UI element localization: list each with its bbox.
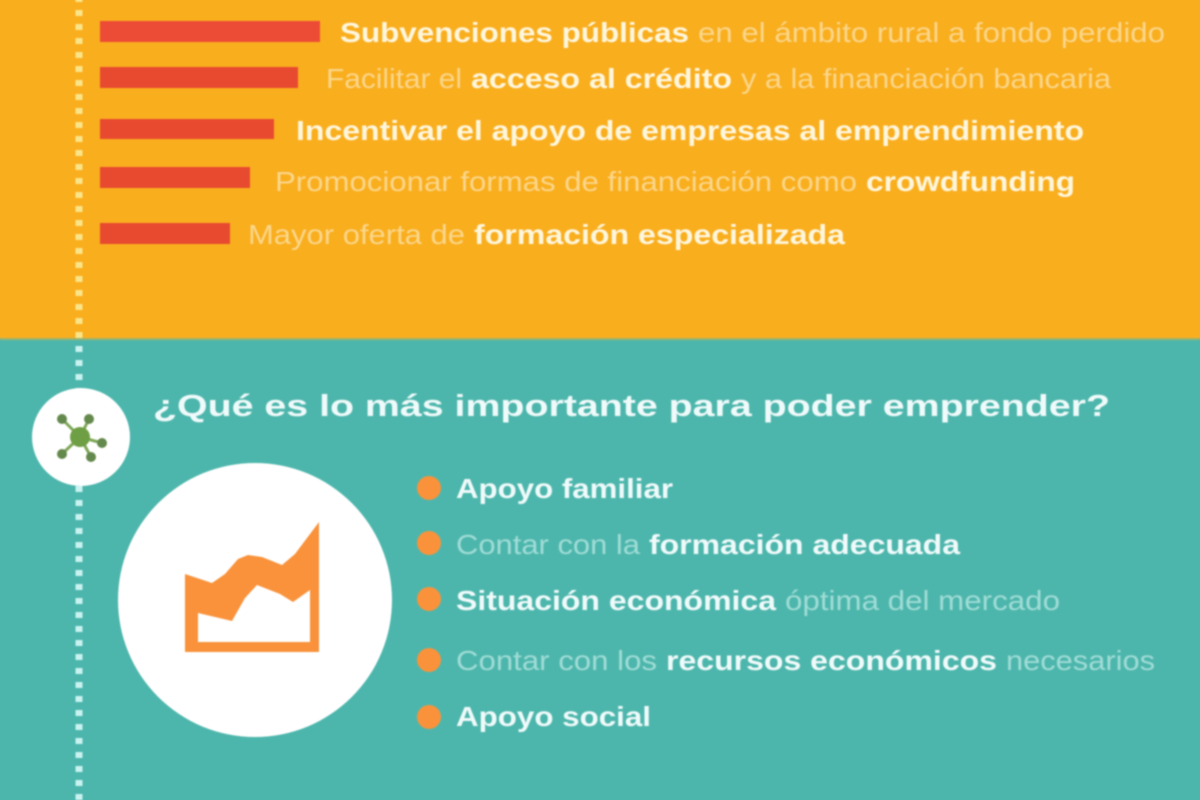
list: bullet 2: Contar con la bbox=[456, 529, 640, 560]
small circle with network icon bbox=[32, 388, 130, 486]
panel: most important to start a business bbox=[0, 338, 1200, 800]
text: formación especializada: Mayor oferta de bbox=[248, 219, 465, 250]
text: acceso al crédito: acceso al crédito bbox=[471, 63, 732, 94]
bar 5 bbox=[100, 223, 230, 244]
heading: ¿Qué es lo más importante para poder emprender? bbox=[153, 388, 1110, 423]
icon: network bbox=[57, 414, 107, 462]
panel: financing measures bbox=[0, 0, 1200, 338]
text: acceso al crédito bbox=[326, 63, 1111, 94]
list: bullet 4: recursos económicos bbox=[666, 645, 997, 676]
list: bullet 1: Apoyo familiar bbox=[456, 473, 673, 504]
list: bullet 3 bbox=[417, 585, 1060, 616]
large circle with area chart icon bbox=[118, 463, 392, 737]
bar 1 bbox=[100, 21, 320, 42]
text: formación especializada bbox=[248, 219, 845, 250]
icon: area chart bbox=[185, 522, 319, 652]
list: bullet 2: formación adecuada bbox=[649, 529, 960, 560]
text: crowdfunding bbox=[275, 166, 1075, 197]
bar 4 bbox=[100, 167, 250, 188]
bar 2 bbox=[100, 67, 298, 88]
text: subvenciones bbox=[340, 17, 1165, 48]
list: bullet 4 bbox=[417, 645, 1155, 676]
list: bullet 2 bbox=[417, 529, 960, 560]
text: acceso al crédito: Facilitar el bbox=[326, 63, 462, 94]
list: bullet 5: Apoyo social bbox=[456, 701, 651, 732]
bar 3 bbox=[100, 119, 274, 139]
list: bullet 3: Situación económica bbox=[456, 585, 776, 616]
text: subvenciones: en el ámbito rural a fondo perdido bbox=[698, 17, 1165, 48]
text: subvenciones: Subvenciones públicas bbox=[340, 17, 689, 48]
text: acceso al crédito: y a la financiación bancaria bbox=[741, 63, 1111, 94]
list: bullet 3: óptima del mercado bbox=[785, 585, 1060, 616]
list: bullet 4: necesarios bbox=[1006, 645, 1155, 676]
text: crowdfunding: Promocionar formas de financiación como bbox=[275, 166, 857, 197]
text: formación especializada: formación especializada bbox=[474, 219, 845, 250]
list: bullet 4: Contar con los bbox=[456, 645, 657, 676]
text: incentivar: Incentivar el apoyo de empresas al emprendimiento bbox=[296, 115, 1084, 146]
text: crowdfunding: crowdfunding bbox=[866, 166, 1075, 197]
